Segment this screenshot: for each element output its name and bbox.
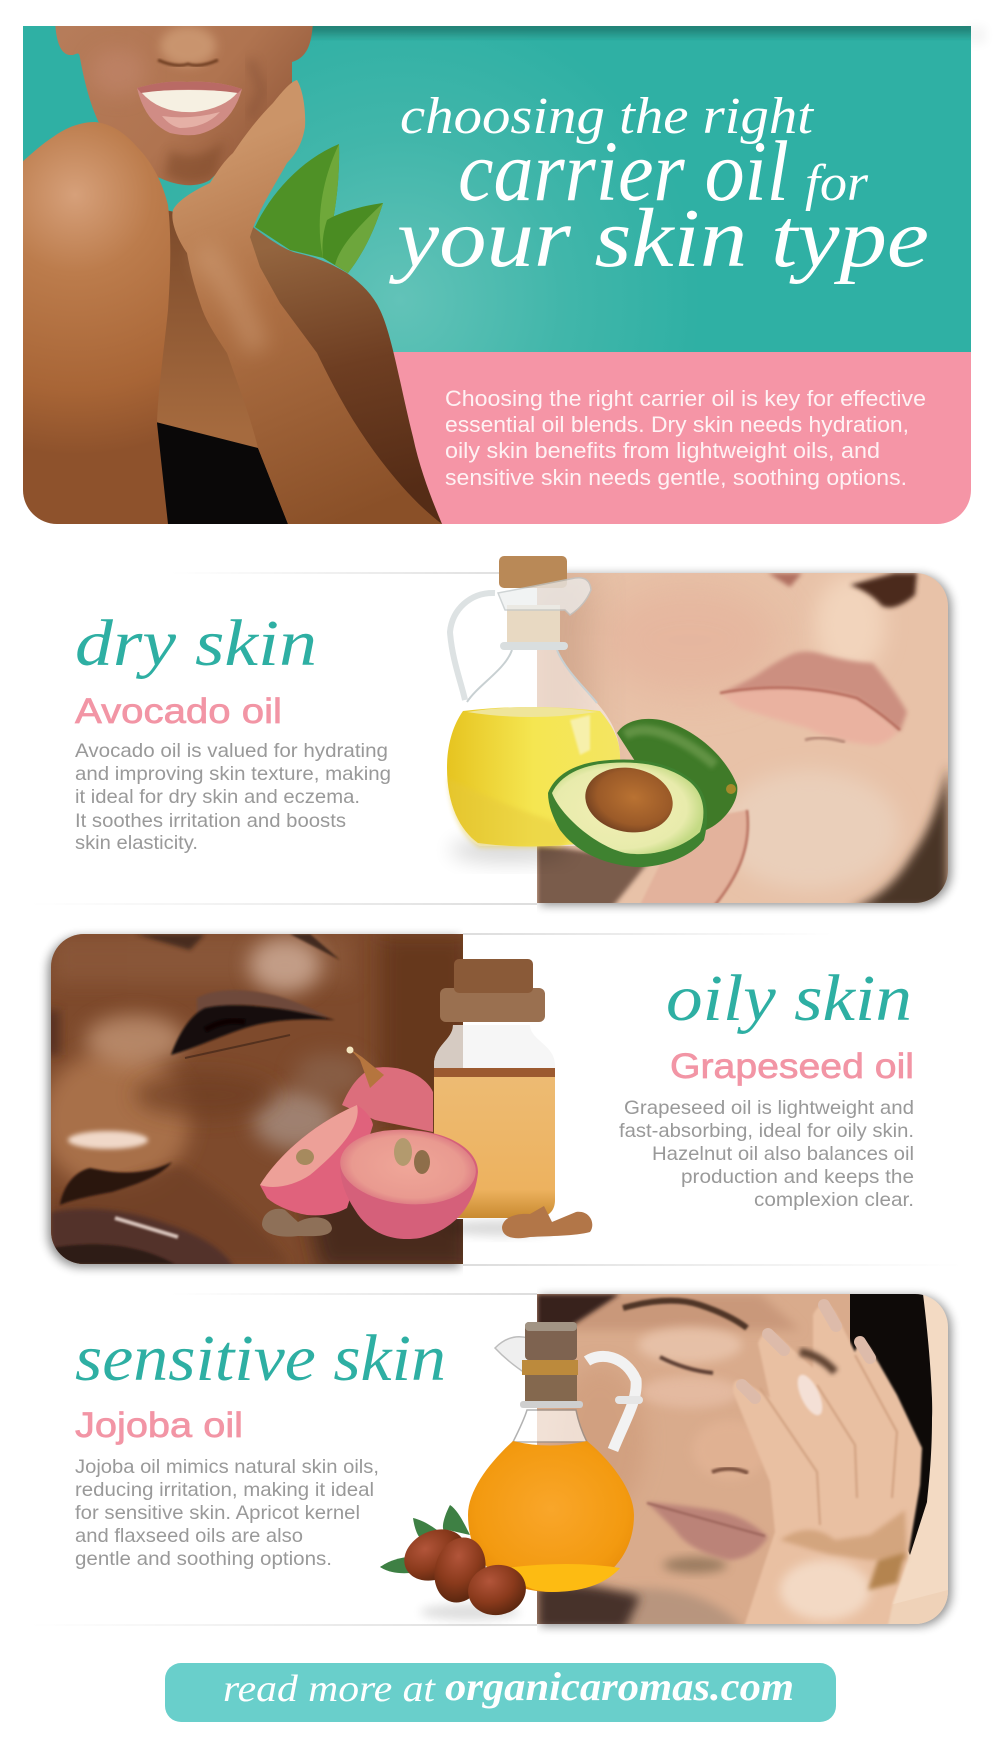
icon: green leaves — [255, 144, 383, 273]
lips — [51, 1209, 236, 1270]
intro text: oily skin benefits from lightweight oils, and — [445, 438, 880, 463]
subheading: Jojoba oil — [75, 1406, 243, 1445]
smile — [137, 82, 242, 135]
call to action button — [165, 1663, 836, 1722]
panel: dry skin — [30, 556, 951, 916]
description: It soothes irritation and boosts — [75, 810, 346, 832]
sensitive skin photo — [530, 1294, 948, 1630]
description — [75, 1456, 379, 1570]
hair — [850, 1294, 932, 1555]
hand and forearm — [172, 80, 442, 524]
description: gentle and soothing options. — [75, 1548, 332, 1570]
jojoba nuts — [396, 1520, 474, 1590]
dry skin photo — [530, 573, 948, 910]
intro text — [445, 386, 926, 490]
back grape — [342, 1067, 433, 1132]
seeds — [262, 1209, 332, 1237]
hand — [733, 1305, 922, 1630]
title: choosing the right — [400, 88, 815, 145]
description: it ideal for dry skin and eczema. — [75, 786, 360, 808]
leaves — [443, 1505, 470, 1535]
lips — [720, 652, 907, 745]
nails — [742, 1305, 870, 1398]
heading: oily skin — [666, 962, 912, 1035]
description: and flaxseed oils are also — [75, 1525, 303, 1547]
description: fast-absorbing, ideal for oily skin. — [619, 1120, 914, 1142]
description: Grapeseed oil is lightweight and — [624, 1097, 914, 1119]
shoulder and arm — [15, 122, 170, 524]
panel: sensitive skin — [30, 1282, 951, 1642]
title: your skin type — [388, 192, 929, 285]
woman photo — [15, 20, 442, 524]
bottle handle and neck — [587, 1356, 636, 1450]
description — [619, 1097, 914, 1211]
icon: oil bottle and avocado — [447, 556, 737, 867]
description: production and keeps the — [681, 1166, 914, 1188]
description: and improving skin texture, making — [75, 763, 391, 785]
heading: dry skin — [75, 607, 317, 680]
panel: header — [15, 18, 986, 524]
lips — [647, 1502, 768, 1560]
description: Avocado oil is valued for hydrating — [75, 740, 388, 762]
intro text: Choosing the right carrier oil is key for effective — [445, 386, 926, 411]
description: for sensitive skin. Apricot kernel — [75, 1502, 360, 1524]
description — [75, 740, 391, 854]
front grape — [340, 1130, 478, 1239]
subheading: Avocado oil — [75, 692, 282, 731]
title — [388, 88, 929, 285]
title: for — [805, 155, 869, 212]
description: reducing irritation, making it ideal — [75, 1479, 374, 1501]
icon: oil bottle and grapes — [260, 959, 592, 1239]
intro text: sensitive skin needs gentle, soothing options. — [445, 465, 907, 490]
avocado back — [617, 719, 737, 830]
intro text: essential oil blends. Dry skin needs hydration, — [445, 412, 909, 437]
heading: sensitive skin — [75, 1322, 446, 1395]
icon: oil bottle and jojoba — [380, 1322, 643, 1620]
beige corner — [889, 1590, 948, 1624]
subheading: Grapeseed oil — [670, 1047, 914, 1086]
title: carrier oil — [458, 123, 789, 219]
description: complexion clear. — [754, 1189, 914, 1211]
description: Jojoba oil mimics natural skin oils, — [75, 1456, 379, 1478]
description: Hazelnut oil also balances oil — [652, 1143, 914, 1165]
oily skin photo — [40, 934, 470, 1270]
nostril — [60, 1162, 172, 1205]
avocado half — [548, 760, 707, 867]
description: skin elasticity. — [75, 832, 198, 854]
panel: oily skin — [40, 925, 963, 1275]
wedge grape — [260, 1105, 373, 1215]
call to action button: organicaromas.com — [445, 1664, 794, 1709]
eye — [197, 990, 325, 1016]
call to action button: read more at — [223, 1668, 437, 1710]
brow and eye — [623, 1301, 747, 1328]
nose — [692, 1420, 768, 1480]
